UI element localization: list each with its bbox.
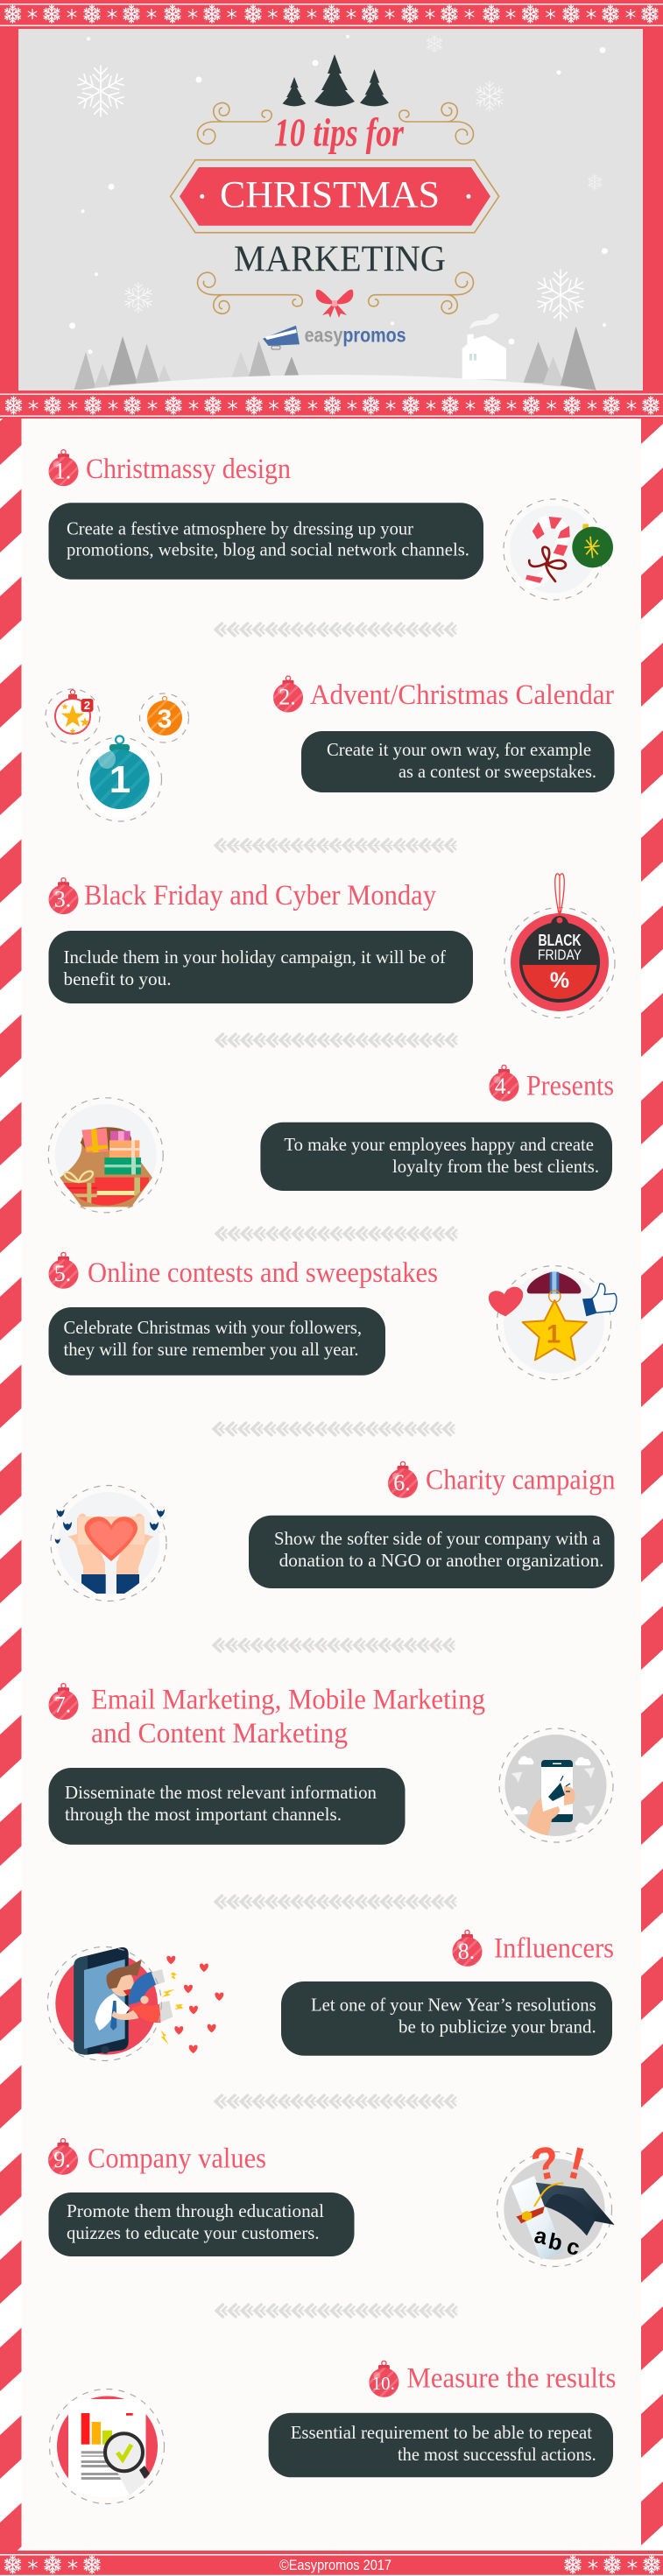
- panel: tip 10 Measure the results: [49, 2361, 616, 2504]
- icon: teal bauble: [77, 735, 166, 821]
- heading: Online contests and sweepstakes: [88, 1257, 438, 1289]
- text pill: loyalty from the best clients.: [392, 1156, 599, 1177]
- panel: tip 5 Online contests: [42, 1252, 617, 1380]
- text pill: [49, 1307, 385, 1376]
- divider: [215, 2303, 458, 2319]
- icon: orange bauble: 3: [158, 705, 172, 734]
- divider: [215, 1032, 458, 1048]
- panel: header: [0, 0, 663, 419]
- text pill: as a contest or sweepstakes.: [399, 761, 596, 782]
- text pill: promotions, website, blog and social network channels.: [67, 539, 469, 560]
- ornament number 2: [267, 676, 313, 722]
- logo: easypromos: [263, 324, 406, 349]
- divider: [214, 837, 457, 853]
- snowflake band: top: [4, 5, 659, 23]
- icon: hand holding phone: [499, 1728, 613, 1848]
- heading: and Content Marketing: [91, 1718, 348, 1749]
- heading: Presents: [526, 1071, 614, 1102]
- text pill: [49, 2192, 354, 2256]
- snowy landscape: [74, 313, 596, 391]
- ornament number 7: 7.: [54, 1692, 71, 1717]
- divider: [212, 1421, 455, 1437]
- icon: graduation cap and scroll: [497, 2136, 615, 2266]
- text pill: they will for sure remember you all year.: [63, 1339, 359, 1360]
- panel: tip 8 Influencers: [47, 1930, 614, 2061]
- text pill: Disseminate the most relevant information: [65, 1782, 377, 1803]
- ornament number 10: 10.: [372, 2373, 395, 2394]
- icon: graduation cap and scroll: c: [565, 2235, 582, 2261]
- icon: black friday tag: FRIDAY: [538, 947, 582, 963]
- ornament number 8: 8.: [458, 1939, 475, 1964]
- text pill: Show the softer side of your company with a: [274, 1528, 601, 1549]
- panel: tip 7 Email, mobile and content marketing: [42, 1684, 613, 1848]
- ornament number 4: [483, 1065, 529, 1111]
- text pill: Include them in your holiday campaign, it will be of: [63, 947, 447, 968]
- icon: teal bauble: 1: [109, 758, 130, 801]
- icon: star bauble: [46, 689, 100, 743]
- ornament number 5: 5.: [54, 1261, 71, 1286]
- title banner: Christmas: [171, 160, 499, 233]
- ornament number 9: [42, 2138, 88, 2185]
- panel: tip 3 Black Friday: [42, 874, 615, 1017]
- heading: Christmassy design: [86, 454, 291, 485]
- icon: influencer with magnet: [47, 1947, 223, 2061]
- icon: black friday tag: BLACK: [538, 932, 582, 949]
- ornament number 3: 3.: [54, 886, 71, 911]
- divider: [214, 1894, 457, 1910]
- text pill: Create a festive atmosphere by dressing up your: [67, 518, 413, 539]
- heading: Email Marketing, Mobile Marketing: [91, 1685, 485, 1716]
- icon: graduation cap and scroll: b: [547, 2229, 565, 2256]
- icon: report under magnifier: [49, 2389, 165, 2504]
- icon: black friday tag: %: [550, 968, 569, 993]
- footer snowflakes: [4, 2556, 660, 2573]
- heading: Influencers: [494, 1933, 614, 1965]
- icon: orange bauble: [140, 693, 189, 743]
- icon: black friday tag: [504, 874, 615, 1017]
- text pill: [49, 931, 473, 1003]
- text pill: be to publicize your brand.: [399, 2016, 596, 2038]
- icon: graduation cap and scroll: a: [533, 2223, 550, 2250]
- divider: [214, 622, 457, 637]
- heading: Charity campaign: [426, 1465, 615, 1496]
- ornament number 7: [42, 1684, 88, 1729]
- text pill: benefit to you.: [63, 968, 172, 989]
- text pill: [260, 1123, 612, 1191]
- divider: [212, 1637, 455, 1653]
- panel: tip 1 Christmassy design: [42, 450, 613, 600]
- text pill: Promote them through educational: [67, 2200, 324, 2221]
- text pill: [249, 1516, 615, 1588]
- ornament number 10: [363, 2361, 408, 2407]
- logo: easypromos: easypromos: [305, 324, 406, 347]
- icon: sack of presents: [48, 1098, 163, 1213]
- text pill: quizzes to educate your customers.: [67, 2222, 319, 2243]
- ornament number 2: 2.: [279, 685, 296, 710]
- panel: tip 6 Charity campaign: [51, 1461, 615, 1601]
- heading: Measure the results: [406, 2363, 616, 2395]
- text pill: [269, 2413, 613, 2477]
- panel: tip 4 Presents: [48, 1065, 614, 1213]
- text pill: through the most important channels.: [65, 1804, 342, 1825]
- heading: Advent/Christmas Calendar: [310, 679, 614, 711]
- text pill: the most successful actions.: [398, 2444, 596, 2465]
- divider: [214, 2094, 457, 2109]
- gold flourishes: [198, 103, 473, 313]
- text pill: [281, 1981, 612, 2056]
- ornament number 6: 6.: [393, 1470, 411, 1496]
- text pill: [49, 503, 483, 580]
- icon: hands holding heart: [51, 1485, 166, 1601]
- icon: graduation cap and scroll: !: [563, 2136, 590, 2190]
- footer band: [0, 2551, 663, 2576]
- icon: medal, heart and thumb: [489, 1266, 617, 1380]
- ornament number 6: [382, 1461, 427, 1508]
- icon: graduation cap and scroll: ?: [526, 2136, 564, 2191]
- ornament number 9: 9.: [53, 2147, 71, 2172]
- title: 10 tips for: 10 tips for: [274, 110, 405, 155]
- ornament number 5: [42, 1252, 88, 1299]
- ornament number 8: [447, 1930, 492, 1976]
- icon: three pine trees: [282, 54, 389, 107]
- ornament number 1: [42, 450, 88, 496]
- icon: medal, heart and thumb: 1: [547, 1320, 561, 1348]
- panel: tip 9 Company values: [42, 2136, 615, 2266]
- text pill: Essential requirement to be able to repeat: [291, 2422, 592, 2443]
- text pill: donation to a NGO or another organization.: [279, 1550, 603, 1571]
- ornament number 4: 4.: [495, 1073, 511, 1099]
- title banner: Christmas: CHRISTMAS: [220, 175, 440, 216]
- icon: star bauble: 2: [84, 699, 90, 712]
- text pill: Let one of your New Year’s resolutions: [311, 1995, 596, 2016]
- ornament number 1: 1.: [54, 458, 71, 483]
- ornament number 3: [42, 878, 88, 924]
- text pill: [49, 1768, 405, 1845]
- heading: [91, 1685, 485, 1749]
- snowflakes and snow dots: [69, 35, 608, 354]
- divider: [215, 1226, 458, 1242]
- heading: Black Friday and Cyber Monday: [84, 880, 436, 911]
- icon: candy cane and bauble: [504, 499, 613, 600]
- copyright: ©Easypromos 2017: [279, 2558, 391, 2573]
- panel: tip 2 Advent calendar: [46, 676, 615, 821]
- text pill: [301, 731, 615, 792]
- heading: Company values: [88, 2143, 266, 2175]
- title: Marketing: MARKETING: [234, 239, 446, 279]
- snowflake band: lower: [4, 397, 659, 414]
- text pill: Celebrate Christmas with your followers,: [63, 1317, 362, 1338]
- text pill: Create it your own way, for example: [327, 739, 591, 760]
- icon: bow: [316, 290, 353, 318]
- text pill: To make your employees happy and create: [284, 1134, 594, 1155]
